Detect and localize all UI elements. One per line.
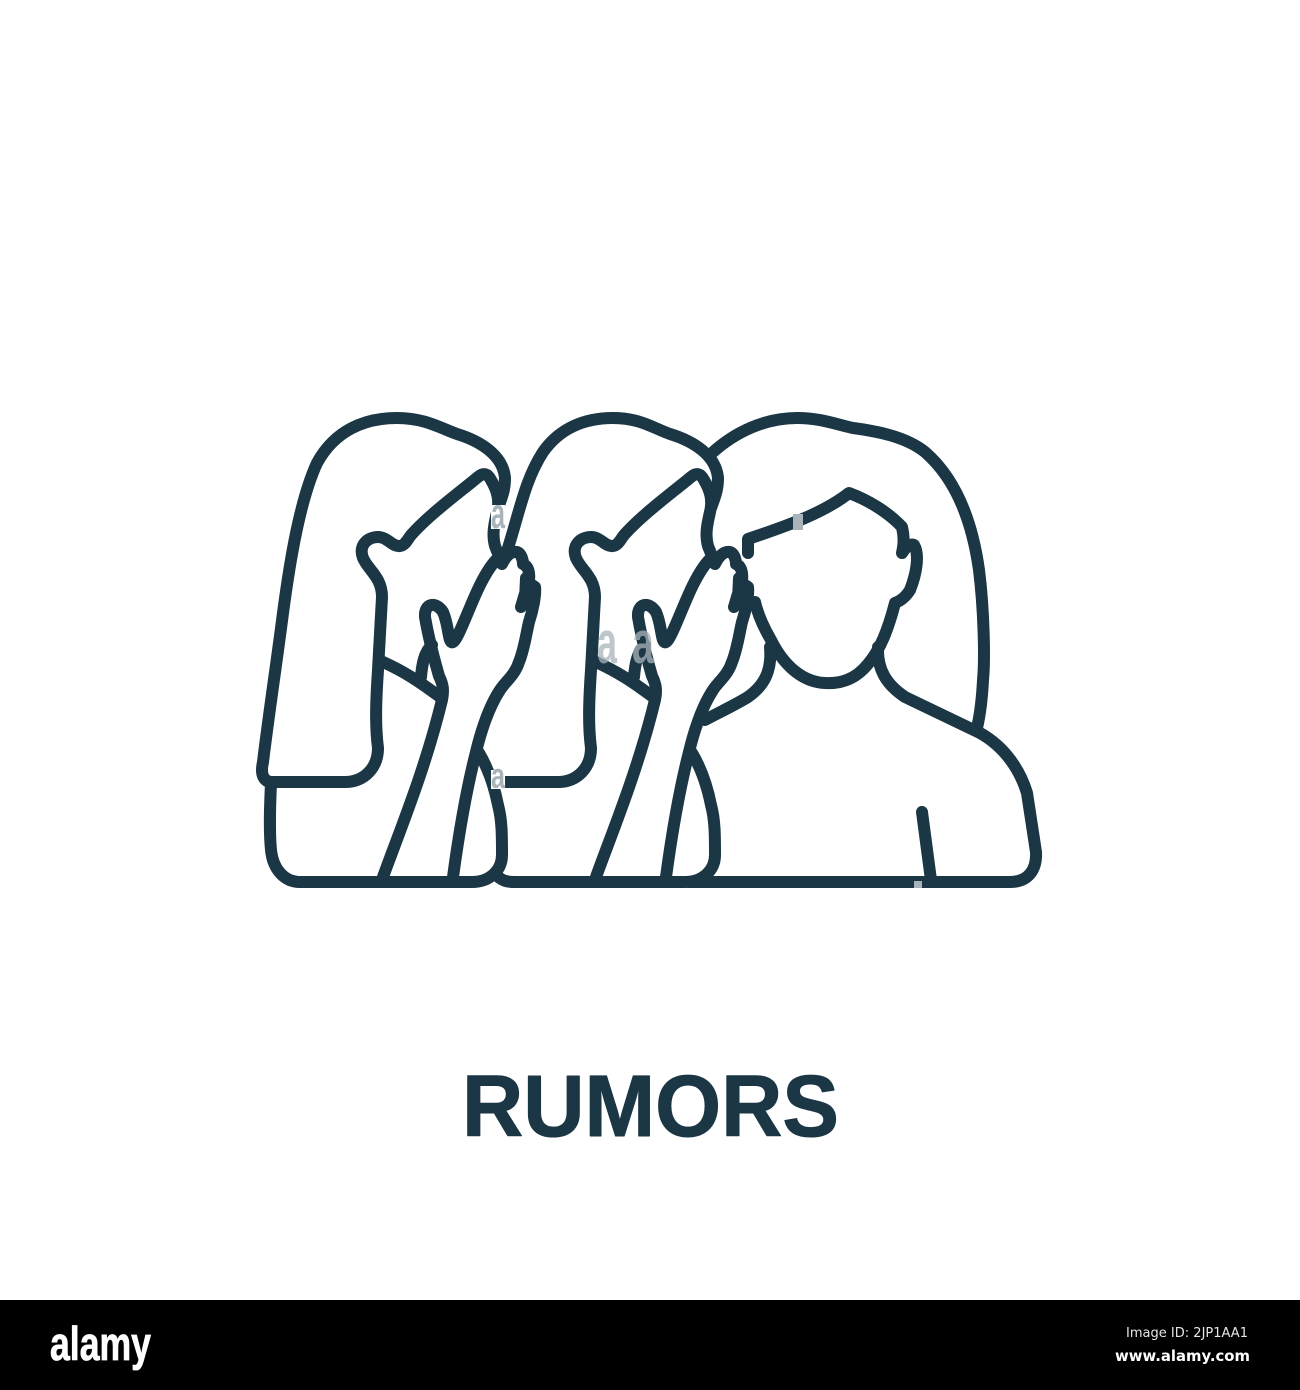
icon: three people whispering rumors (262, 418, 1036, 882)
watermark letters over the icon (491, 490, 922, 888)
watermark letters over the icon: a (597, 609, 617, 676)
watermark letters over the icon: a (632, 609, 654, 676)
website text: www.alamy.com (1115, 1347, 1250, 1365)
footer bar (0, 1300, 1300, 1390)
image ID text: Image ID: 2JP1AA1 (1126, 1325, 1248, 1341)
icon: second whispering woman (497, 418, 748, 882)
icon: first whispering woman (262, 418, 535, 882)
logo: alamy: alamy (50, 1317, 151, 1370)
watermark letters over the icon: a (491, 755, 506, 796)
title: RUMORS: RUMORS (462, 1058, 839, 1155)
icon: listening woman (690, 418, 1036, 882)
watermark letters over the icon: a (491, 490, 506, 538)
